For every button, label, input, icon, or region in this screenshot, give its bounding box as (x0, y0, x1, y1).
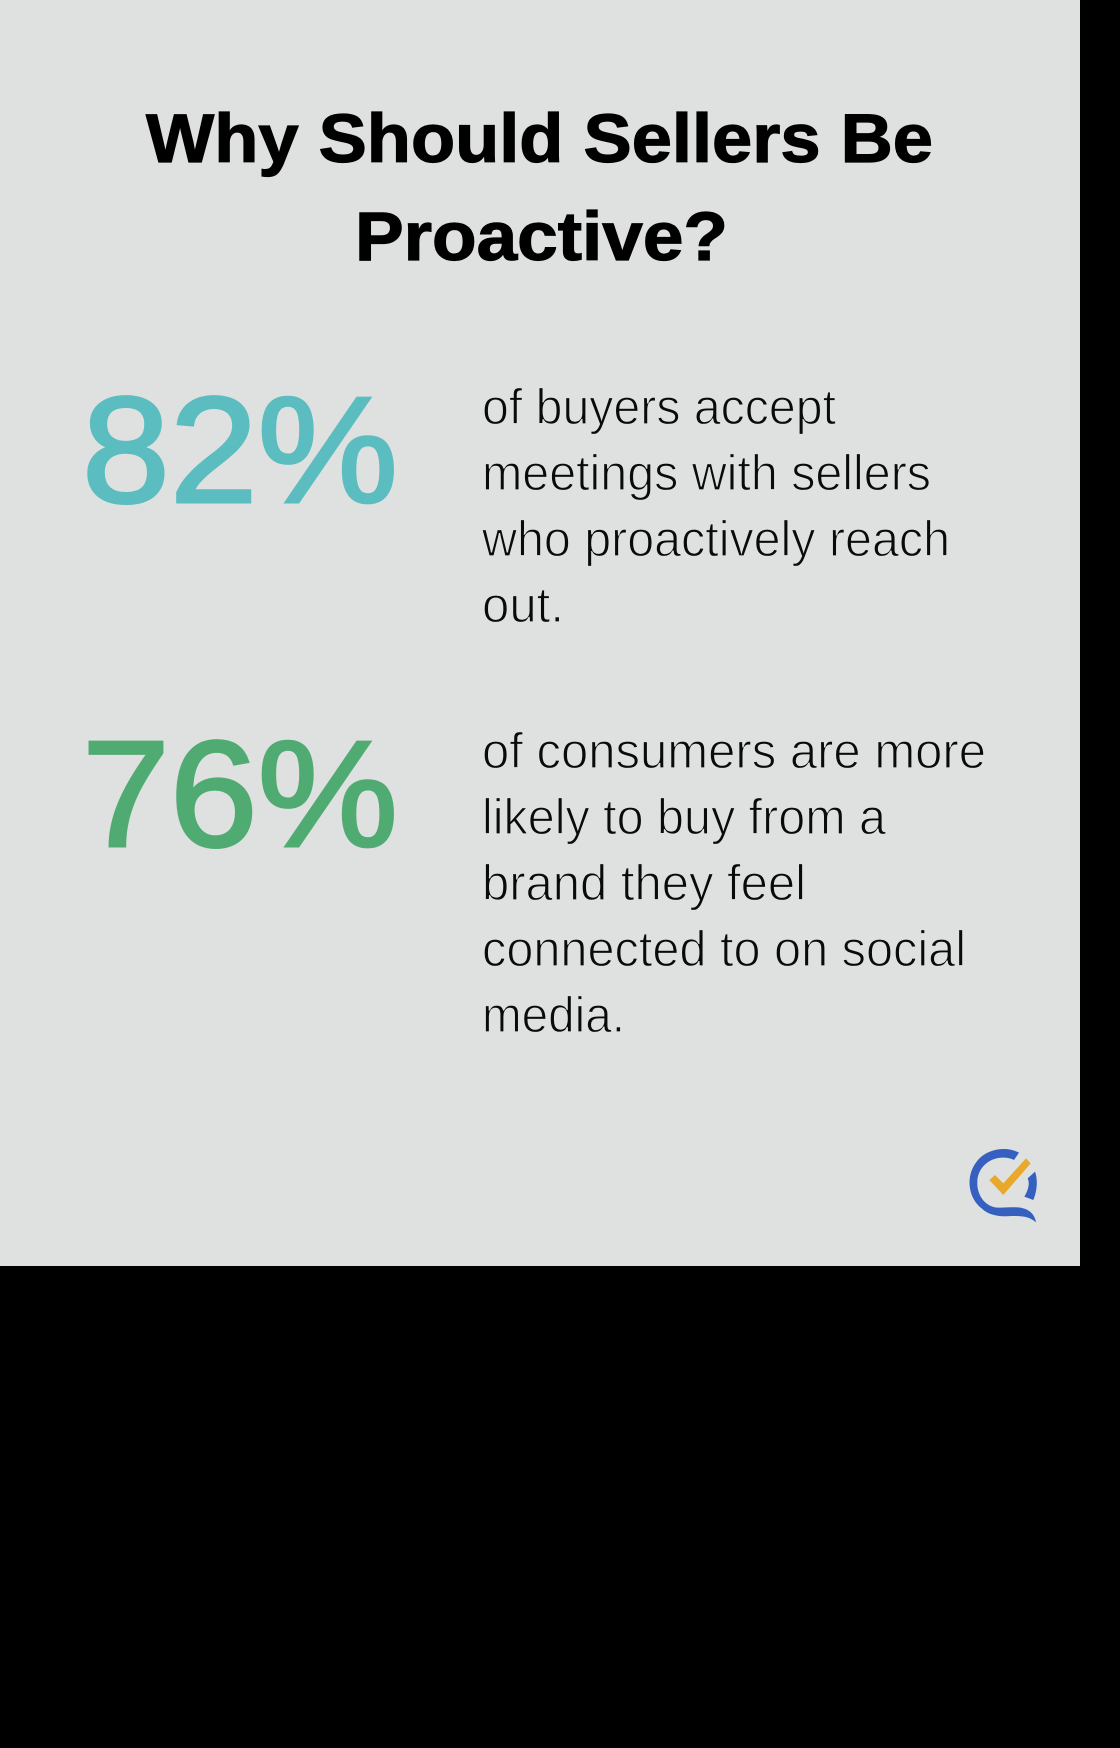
text block: consumers more likely to buy: brand they feel (482, 855, 806, 911)
text block: buyers accept meetings: meetings with sellers (482, 445, 931, 501)
text block: consumers more likely to buy: of consumers are more (482, 723, 986, 779)
text block: buyers accept meetings (481, 379, 950, 633)
text block: consumers more likely to buy: likely to buy from a (482, 789, 886, 845)
stat: 82 percent: 82% (82, 365, 398, 534)
panel: background card (0, 0, 1080, 1266)
text block: buyers accept meetings: out. (482, 577, 564, 633)
text block: buyers accept meetings: who proactively reach (481, 511, 950, 567)
text block: consumers more likely to buy: connected to on social (482, 921, 966, 977)
text block: consumers more likely to buy: media. (482, 987, 625, 1043)
title: Proactive? (355, 198, 728, 275)
text block: consumers more likely to buy (482, 723, 986, 1043)
text block: buyers accept meetings: of buyers accept (482, 379, 836, 435)
icon: chat bubble check logo (970, 1149, 1037, 1222)
title: Why Should Sellers Be (146, 100, 933, 177)
title (146, 100, 933, 275)
stat: 76 percent: 76% (82, 709, 398, 878)
